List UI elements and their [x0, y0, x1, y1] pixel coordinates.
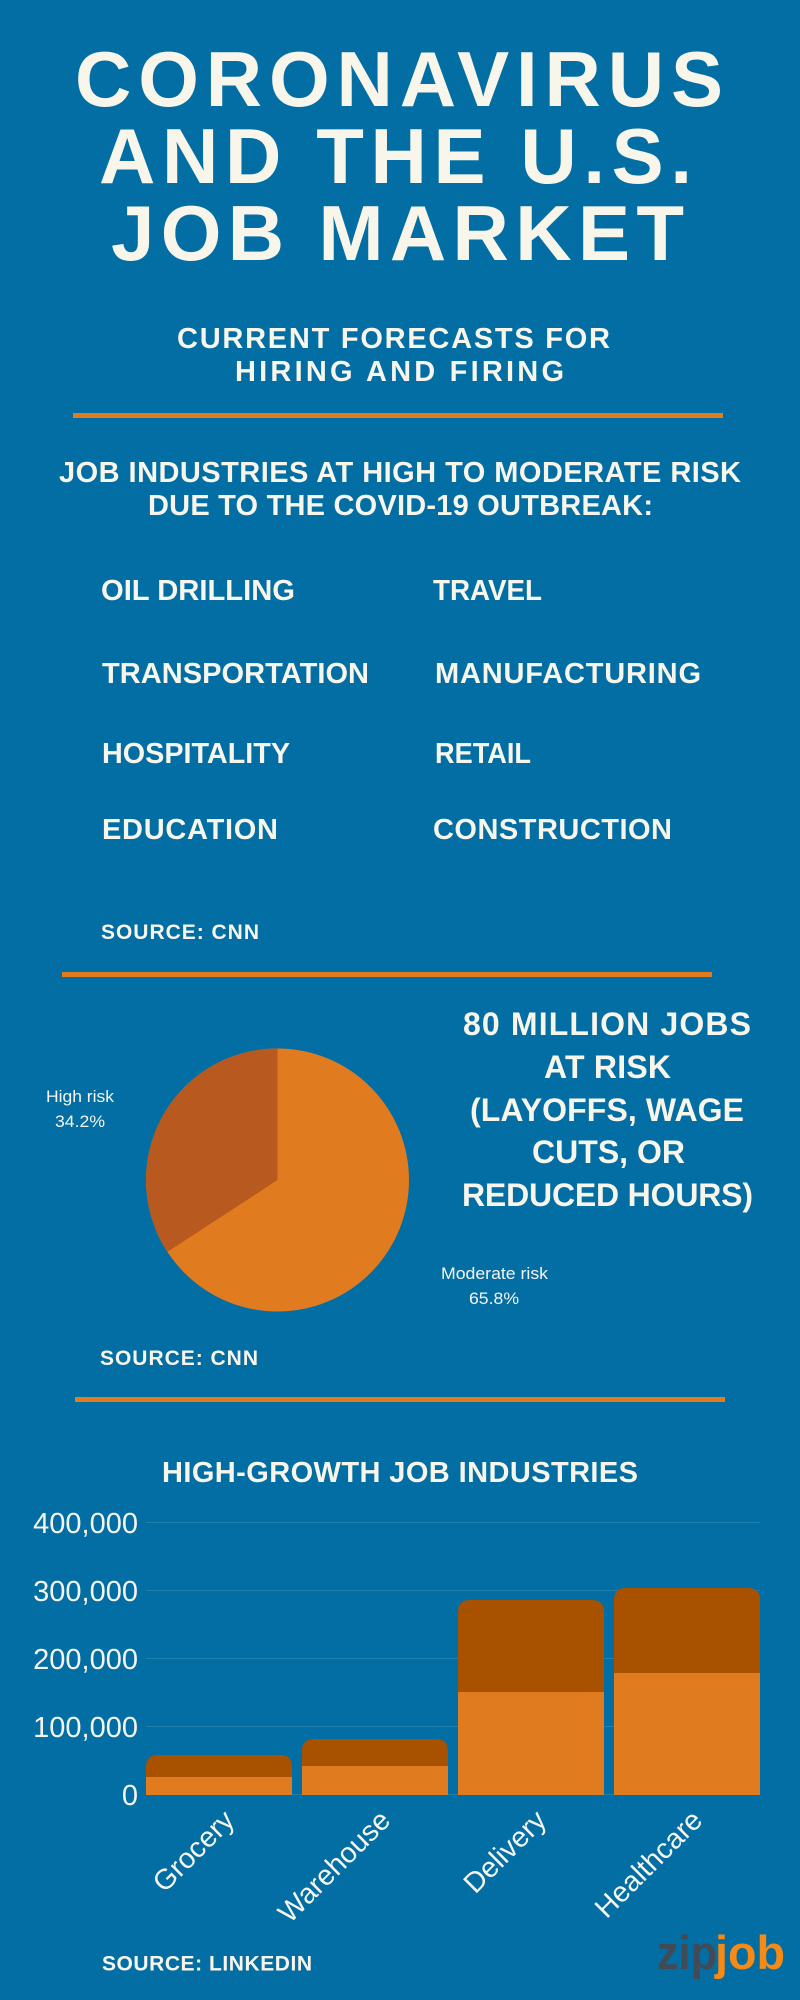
heading: industries at risk: JOB INDUSTRIES AT HIGH TO MODERATE RISK — [59, 457, 741, 489]
source: CNN: SOURCE: CNN — [100, 1347, 258, 1370]
y axis labels: 0 — [122, 1780, 138, 1812]
industry list: HOSPITALITY — [102, 738, 290, 770]
pie label: high risk: 34.2% — [55, 1112, 105, 1131]
source: LinkedIn: SOURCE: LINKEDIN — [102, 1952, 312, 1976]
y axis labels: 200,000 — [33, 1644, 138, 1676]
stacked bar chart — [33, 1508, 760, 1929]
panel: 80 million jobs at risk — [46, 1006, 753, 1370]
industry list — [101, 575, 701, 846]
callout: 80 million jobs at risk: CUTS, OR — [532, 1134, 685, 1170]
industry list: MANUFACTURING — [435, 658, 701, 690]
panel: high-growth job industries — [33, 1457, 760, 1976]
bar: healthcare — [614, 1588, 760, 1795]
x axis labels — [147, 1804, 709, 1929]
pie label: high risk: High risk — [46, 1087, 115, 1106]
callout: 80 million jobs at risk: REDUCED HOURS) — [462, 1177, 753, 1213]
industry list: EDUCATION — [102, 814, 278, 846]
title: JOB MARKET — [111, 189, 684, 277]
y axis labels — [33, 1508, 138, 1812]
heading: industries at risk: DUE TO THE COVID-19 OUTBREAK: — [148, 490, 653, 522]
x axis labels: Warehouse — [272, 1804, 397, 1929]
panel: industries at risk — [59, 457, 741, 944]
industry list: CONSTRUCTION — [433, 814, 672, 846]
pie label: high risk — [46, 1087, 115, 1131]
industry list: TRANSPORTATION — [102, 658, 369, 690]
subtitle: CURRENT FORECASTS FOR — [177, 323, 610, 355]
source: CNN: SOURCE: CNN — [101, 921, 259, 944]
heading: high-growth: HIGH-GROWTH JOB INDUSTRIES — [162, 1457, 638, 1489]
heading: industries at risk — [59, 457, 741, 522]
callout: 80 million jobs at risk: 80 MILLION JOBS — [463, 1006, 751, 1042]
pie chart — [146, 1048, 409, 1312]
x axis labels: Delivery — [458, 1804, 553, 1900]
bar: delivery — [458, 1600, 604, 1795]
subtitle: HIRING AND FIRING — [235, 356, 564, 388]
bar: warehouse — [302, 1739, 448, 1795]
industry list: OIL DRILLING — [101, 575, 295, 607]
industry list: RETAIL — [435, 738, 531, 770]
callout: 80 million jobs at risk — [462, 1006, 753, 1213]
callout: 80 million jobs at risk: AT RISK — [544, 1049, 671, 1085]
subtitle — [177, 323, 610, 388]
pie label: moderate risk — [441, 1264, 549, 1308]
bar: grocery — [146, 1755, 292, 1795]
logo: zipjob — [657, 1926, 785, 1979]
title: AND THE U.S. — [99, 112, 692, 200]
industry list: TRAVEL — [433, 575, 542, 607]
title — [75, 35, 723, 277]
pie label: moderate risk: Moderate risk — [441, 1264, 549, 1283]
callout: 80 million jobs at risk: (LAYOFFS, WAGE — [470, 1092, 744, 1128]
pie label: moderate risk: 65.8% — [469, 1289, 519, 1308]
x axis labels: Healthcare — [589, 1804, 709, 1924]
y axis labels: 100,000 — [33, 1712, 138, 1744]
logo: zipjob: job — [714, 1926, 785, 1979]
x axis labels: Grocery — [147, 1804, 241, 1899]
y axis labels: 300,000 — [33, 1576, 138, 1608]
title: CORONAVIRUS — [75, 35, 723, 123]
y axis labels: 400,000 — [33, 1508, 138, 1540]
logo: zipjob: zip — [657, 1926, 717, 1979]
